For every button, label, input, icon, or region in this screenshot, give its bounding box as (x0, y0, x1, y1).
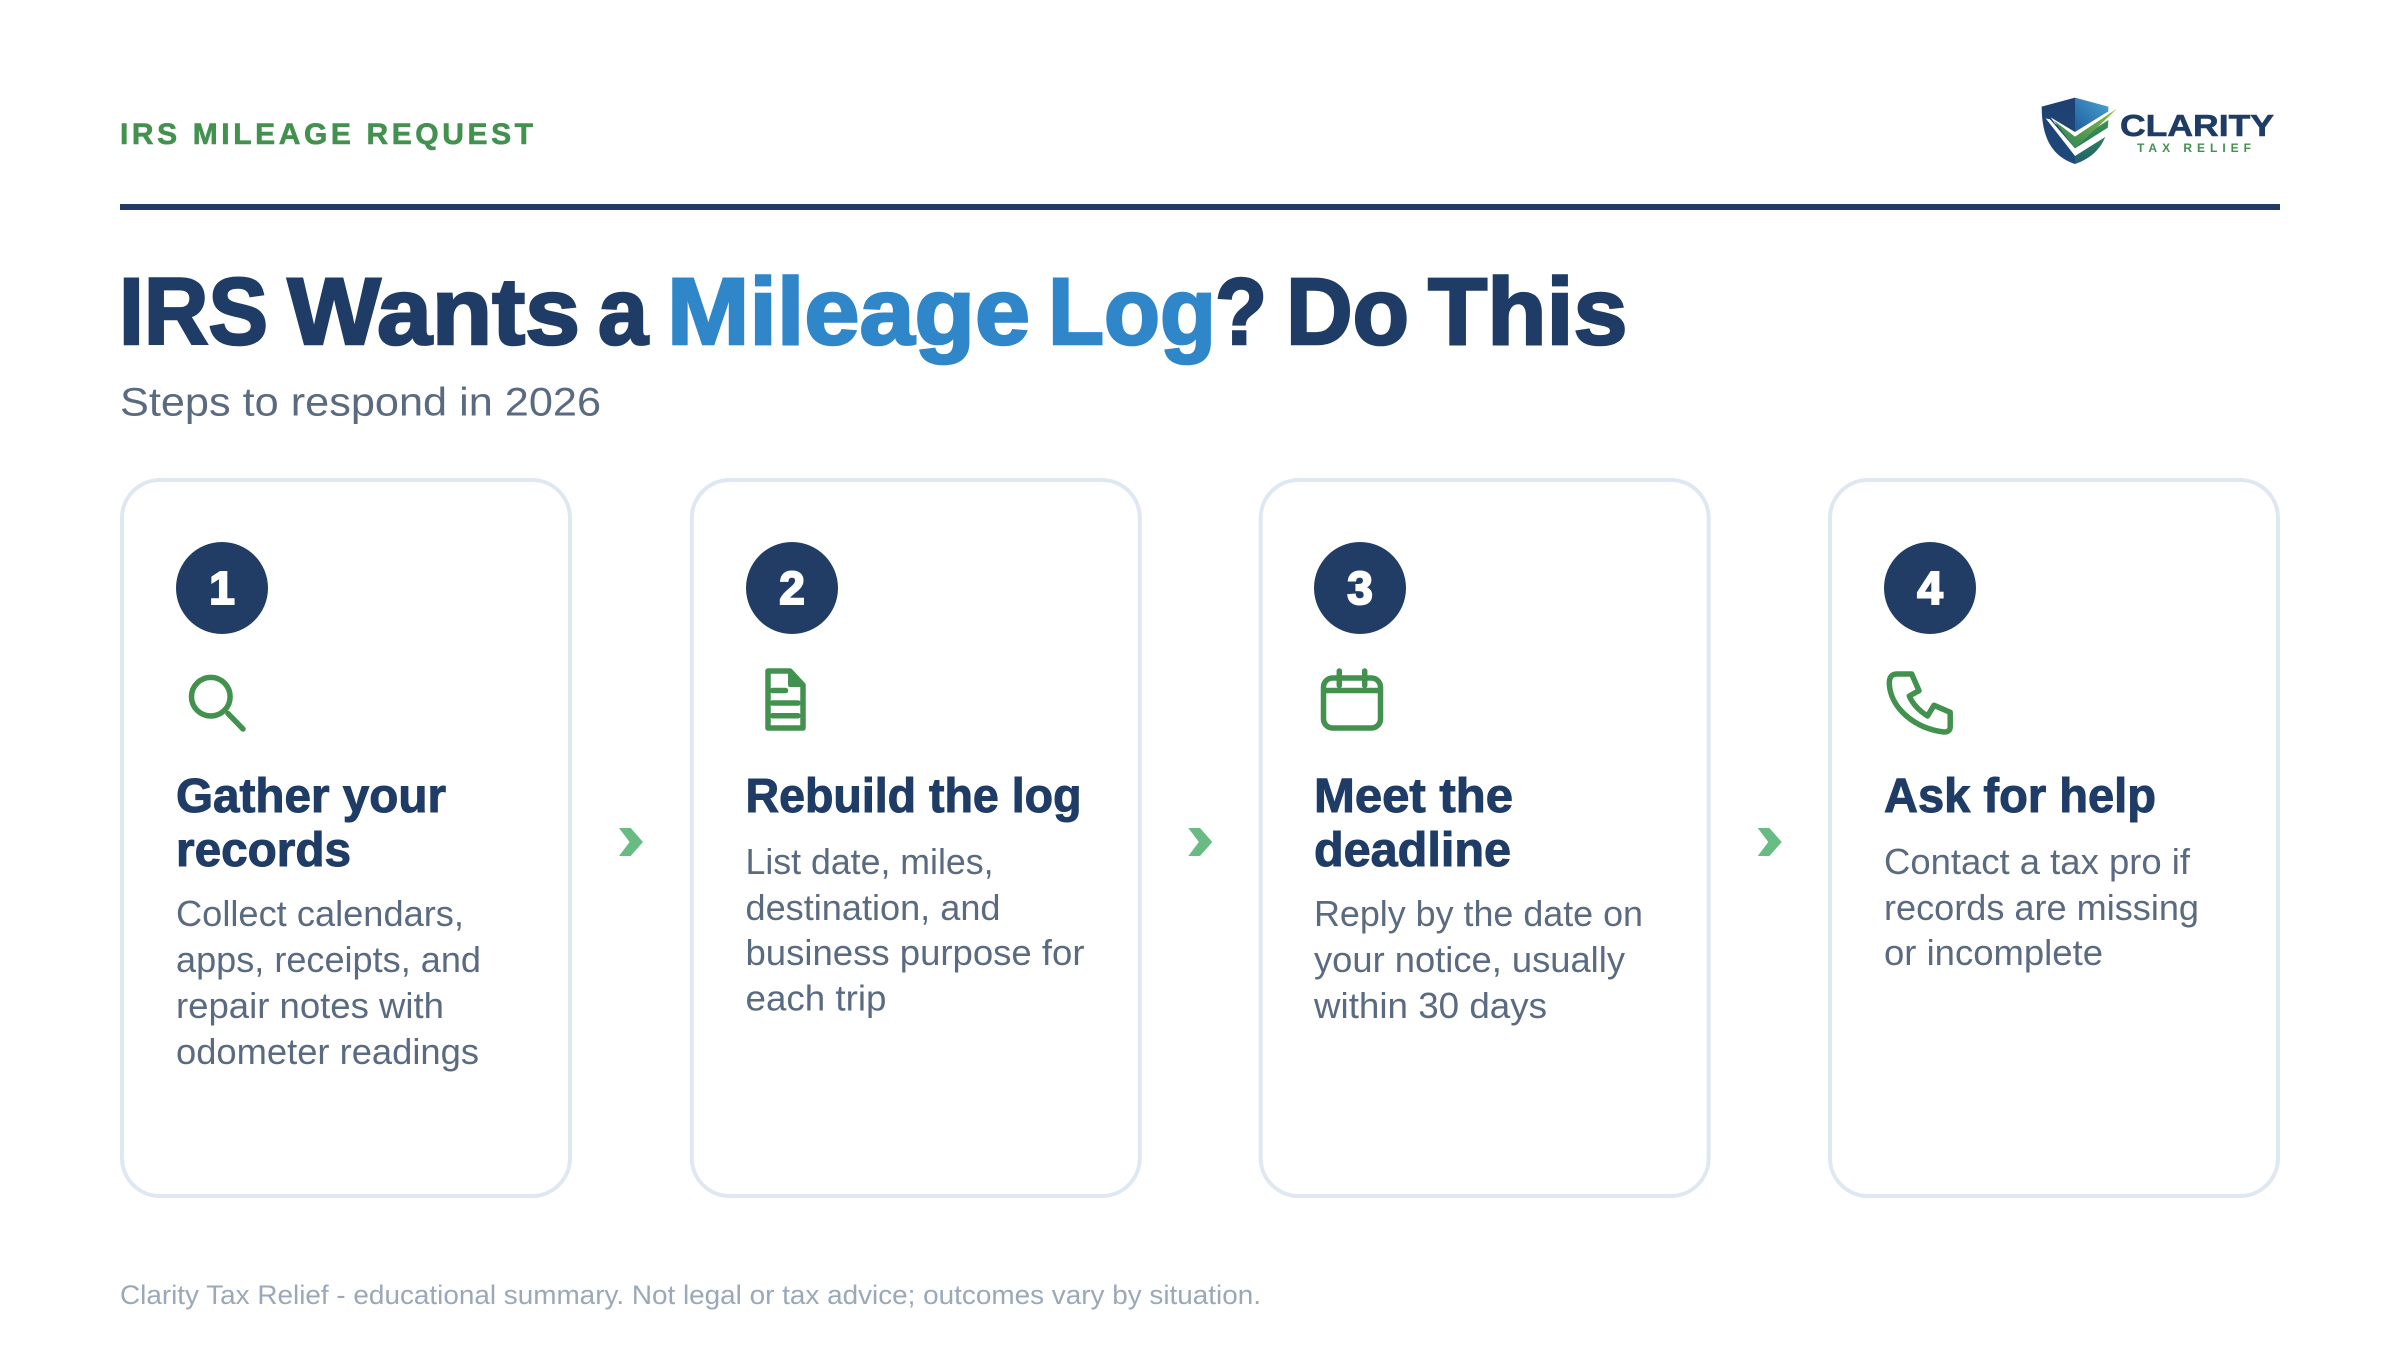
logo wordmark: CLARITY (2120, 108, 2274, 143)
step 3 heading: deadline (1314, 824, 1511, 877)
step 4 description (1884, 841, 2199, 973)
title: a (598, 259, 649, 365)
step number 2 (746, 542, 838, 634)
step 3 heading: Meet the (1314, 770, 1513, 823)
icon: calendar (1324, 671, 1380, 728)
panel: step 4 (1830, 480, 2278, 1196)
step 2 heading: Rebuild the log (746, 770, 1082, 823)
step 3 description (1313, 893, 1643, 1026)
panel: step 1 (122, 480, 570, 1196)
step 3 description: Reply by the date on (1314, 893, 1643, 934)
icon: phone (1889, 674, 1950, 732)
title: ? (1215, 259, 1267, 365)
title: Do (1286, 259, 1409, 365)
title: IRS (119, 259, 268, 365)
step 1 description: repair notes with (176, 985, 444, 1026)
step number 1 (176, 542, 268, 634)
step number 2: 2 (779, 562, 805, 614)
title (119, 259, 1628, 365)
step number 3 (1314, 542, 1406, 634)
step 2 description: each trip (746, 978, 886, 1018)
title: Mileage (667, 259, 1030, 365)
step 1 description (176, 893, 481, 1072)
step 4 description: records are missing (1884, 887, 2199, 928)
panel: step 3 (1261, 480, 1709, 1196)
step 2 description (746, 841, 1085, 1018)
step 1 description: apps, receipts, and (176, 939, 481, 980)
step 1 heading: records (176, 824, 351, 877)
icon: shield with check (2042, 98, 2117, 164)
step number 1: 1 (209, 562, 235, 614)
step 3 description: your notice, usually (1314, 939, 1625, 980)
logo: Clarity Tax Relief (2042, 98, 2274, 164)
step 4 heading: Ask for help (1884, 770, 2156, 823)
step 1 description: Collect calendars, (176, 893, 464, 934)
step 4 description: Contact a tax pro if (1884, 841, 2191, 882)
title: This (1428, 259, 1628, 365)
step number 3: 3 (1347, 562, 1373, 614)
step number 4 (1884, 542, 1976, 634)
step 2 description: List date, miles, (746, 841, 994, 882)
step 1 heading (176, 770, 446, 877)
subtitle: Steps to respond in 2026 (120, 380, 601, 424)
footer disclaimer: Clarity Tax Relief - educational summary. Not legal or tax advice; outcomes vary by situation. (120, 1280, 1261, 1310)
step 3 heading (1314, 770, 1513, 877)
icon: document (768, 671, 803, 728)
icon: magnifying glass (192, 677, 243, 729)
step 3 description: within 30 days (1313, 985, 1547, 1026)
title: Wants (288, 259, 580, 365)
step 4 description: or incomplete (1884, 932, 2103, 973)
step number 4: 4 (1917, 562, 1943, 614)
eyebrow label: IRS MILEAGE REQUEST (120, 118, 533, 151)
arrow 1 (619, 828, 643, 856)
step 1 heading: Gather your (176, 770, 446, 823)
panel: step 2 (692, 480, 1140, 1196)
arrow 3 (1758, 828, 1782, 856)
step 2 description: business purpose for (746, 932, 1085, 973)
title: Log (1048, 259, 1216, 365)
step 2 description: destination, and (746, 887, 1000, 928)
step 1 description: odometer readings (176, 1031, 479, 1072)
arrow 2 (1188, 828, 1212, 856)
logo tagline: TAX RELIEF (2137, 141, 2251, 155)
